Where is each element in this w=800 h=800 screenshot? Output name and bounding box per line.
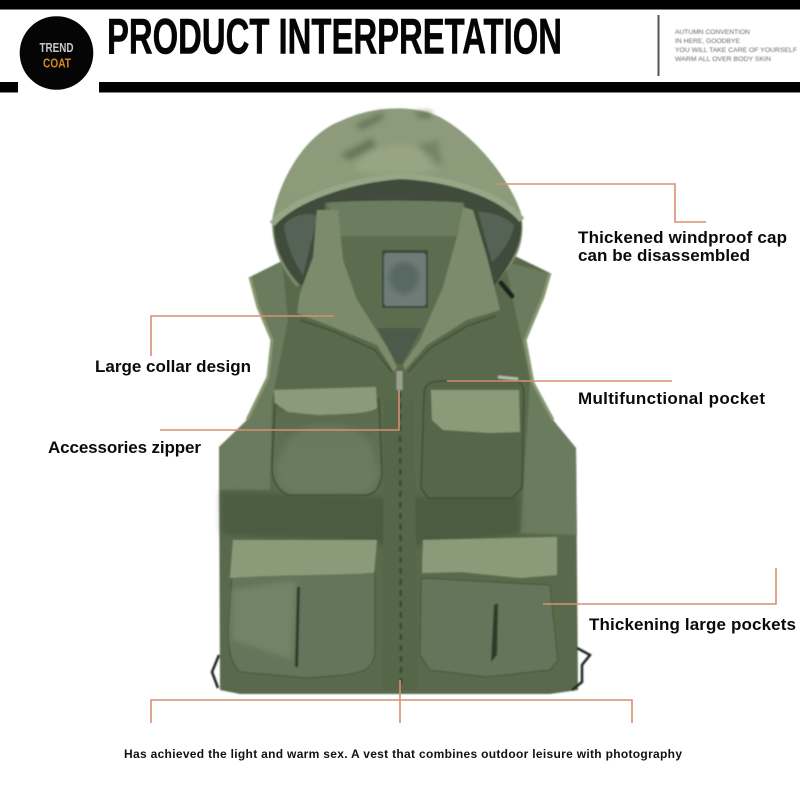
inner back collar	[320, 201, 478, 368]
hood fold highlight	[355, 145, 440, 174]
neck patch	[382, 250, 428, 308]
callout: collar	[95, 316, 334, 376]
vest body	[219, 257, 578, 694]
callout: zipper: Accessories zipper	[48, 438, 201, 457]
hood lining	[284, 212, 514, 275]
callout: hood	[495, 184, 787, 265]
left side panel highlight	[219, 261, 288, 490]
callout: hood: can be disassembled	[578, 246, 750, 265]
collar zip seams	[300, 316, 496, 372]
chest zip pull	[498, 377, 518, 379]
main zipper	[396, 371, 402, 690]
hood folds	[340, 112, 442, 168]
title: PRODUCT INTERPRETATION	[107, 8, 562, 64]
callout: collar: Large collar design	[95, 357, 251, 376]
bottom-left pocket	[228, 540, 377, 678]
logo badge: Trend Coat	[20, 16, 93, 90]
header side note: WARM ALL OVER BODY SKIN	[675, 56, 771, 63]
centre placket	[382, 400, 418, 690]
header side note	[658, 15, 797, 76]
top-left pocket	[272, 387, 382, 495]
callout: large pockets	[543, 568, 796, 634]
header side note: AUTUMN CONVENTION	[675, 29, 750, 36]
armhole piping	[247, 273, 553, 420]
fleece neck	[377, 328, 422, 364]
hood rim	[272, 176, 522, 224]
logo badge: Trend Coat: TREND	[40, 41, 74, 55]
footer caption: Has achieved the light and warm sex. A vest that combines outdoor leisure with photography	[124, 747, 682, 761]
hood toggle	[501, 283, 512, 296]
right side panel highlight	[505, 262, 577, 535]
logo badge: Trend Coat: COAT	[43, 56, 71, 70]
header band	[0, 0, 800, 92]
callout: hood: Thickened windproof cap	[578, 228, 787, 247]
header side note: IN HERE, GOODBYE	[675, 38, 741, 45]
callout: chest pocket: Multifunctional pocket	[578, 389, 765, 408]
hood	[272, 108, 522, 287]
left collar flap	[297, 210, 397, 372]
callout: zipper	[48, 390, 399, 457]
bottom-right pocket	[420, 537, 558, 677]
bracket: whole garment	[151, 680, 632, 723]
vest illustration	[212, 108, 590, 694]
hem cords	[212, 648, 590, 690]
header side note: YOU WILL TAKE CARE OF YOURSELF	[675, 47, 797, 54]
dark chest band	[221, 492, 520, 545]
right collar flap	[403, 207, 500, 370]
hood interior	[274, 178, 522, 285]
top-right pocket	[421, 381, 524, 498]
callout: large pockets: Thickening large pockets	[589, 615, 796, 634]
